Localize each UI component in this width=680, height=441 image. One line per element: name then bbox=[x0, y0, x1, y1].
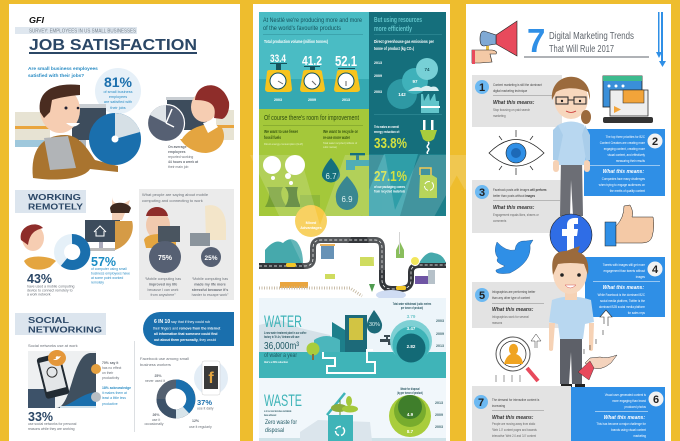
item 5: 5 bbox=[479, 290, 485, 302]
scale: 2013: 2013 bbox=[342, 98, 350, 102]
scale: 2003: 33.4 bbox=[270, 53, 287, 65]
stat: 81%: their jobs bbox=[110, 106, 126, 110]
icon: megaphone bbox=[472, 21, 517, 64]
clock bbox=[148, 104, 184, 142]
year labels: 2009 bbox=[374, 74, 382, 78]
train bbox=[259, 282, 362, 296]
stat: 43%: 43% bbox=[27, 272, 52, 286]
badge: mixed advantages: Advantages bbox=[300, 226, 322, 230]
year labels: 2003 bbox=[374, 90, 382, 94]
chart: social networks use at work bbox=[28, 343, 96, 408]
twitter bubble bbox=[48, 350, 66, 366]
item 2: the merits of quality content bbox=[610, 189, 645, 193]
section: packaging: of our packaging comes bbox=[374, 185, 405, 189]
figure: man bbox=[549, 246, 594, 387]
section: water: A new water treatment plant in our coffee bbox=[264, 330, 307, 335]
item 6: 6 bbox=[653, 394, 659, 406]
section: improvement: We want to recycle or bbox=[323, 129, 358, 134]
car bbox=[286, 263, 406, 290]
item 4: While Facebook is the dominant B2C bbox=[598, 293, 645, 297]
productivity notes: least a little less bbox=[102, 396, 126, 400]
item 2: The top three priorities for B2C bbox=[606, 135, 645, 139]
stat: 33% bbox=[28, 410, 77, 431]
item 7: 'Web 1.0' content pages and towards bbox=[492, 428, 537, 432]
heading: working remotely bbox=[15, 190, 86, 213]
stat: 33%: use social networks for personal bbox=[28, 422, 77, 426]
facebook use heading: Facebook use among small bbox=[140, 356, 189, 361]
section: packaging: 27.1% bbox=[374, 169, 407, 185]
icon: hand with arrow bbox=[578, 310, 617, 380]
icon: eye bbox=[489, 130, 544, 175]
donut labels: use it regularly bbox=[189, 425, 212, 429]
item 7: interactive 'Web 2.0 and 3.0' content bbox=[492, 434, 536, 438]
item 4: What this means: bbox=[603, 285, 644, 291]
item 6: brands using visual content bbox=[611, 428, 646, 432]
man at desk bbox=[110, 196, 133, 250]
phone icon bbox=[36, 353, 70, 399]
stat: 37%: use it daily bbox=[197, 406, 214, 410]
item 1: Stop focusing on paid search bbox=[493, 108, 530, 112]
monitor: man bbox=[70, 104, 106, 148]
stat: 43%: a work network bbox=[27, 292, 51, 296]
section: waste: WASTE bbox=[264, 391, 302, 410]
item 1: Content marketing is still the dominant bbox=[493, 83, 542, 87]
woman illustration bbox=[180, 85, 229, 153]
stat: 33.8%: 33.8% bbox=[374, 136, 407, 152]
stat: 25%: 25% bbox=[204, 255, 218, 262]
section: improvement: fossil fuels bbox=[264, 135, 281, 140]
item 2: measuring their results bbox=[616, 159, 645, 163]
stat: 57% bbox=[91, 255, 130, 284]
chart: waste for disposal: 2013 bbox=[435, 401, 443, 405]
item 4: 4 bbox=[652, 264, 659, 276]
background buildings bbox=[15, 110, 234, 147]
icon: twitter bird bbox=[495, 240, 533, 274]
question: Are small business employees bbox=[28, 66, 98, 72]
quotes: made my life more bbox=[194, 282, 226, 286]
productivity notes: it makes them at bbox=[102, 391, 127, 395]
item 6: Visual user-generated content is bbox=[605, 393, 646, 397]
question: satisfied with their jobs? bbox=[28, 73, 84, 79]
item 1 bbox=[472, 75, 562, 127]
productivity notes: 18% acknowledge bbox=[102, 386, 131, 390]
year labels bbox=[374, 61, 382, 94]
factory bbox=[408, 86, 440, 113]
stat: 33%: reasons while they are working bbox=[28, 427, 75, 431]
section: packaging: from recycled materials bbox=[374, 190, 405, 194]
item 7 bbox=[472, 386, 571, 441]
section: efficiency: Direct greenhouse gas emissions per bbox=[374, 39, 434, 44]
survey band bbox=[15, 27, 137, 34]
quotes: because I can work bbox=[148, 288, 179, 292]
chart: total water withdrawal: 2009 bbox=[436, 332, 444, 336]
clock caption: On average bbox=[168, 145, 186, 149]
stat: 43% bbox=[27, 272, 75, 296]
item 3: Facebook posts with images will perform bbox=[493, 188, 546, 192]
item 3 bbox=[472, 180, 562, 233]
item 6: What this means: bbox=[604, 415, 645, 421]
productivity notes bbox=[102, 361, 131, 406]
item 3: What this means: bbox=[493, 205, 535, 211]
clock caption: employees bbox=[168, 150, 186, 154]
item 7: The demand for interactive content is bbox=[492, 398, 540, 402]
heading: working remotely: WORKING bbox=[28, 192, 81, 202]
water drop: 6.9: 6.9 bbox=[342, 194, 353, 204]
item 2: engaging content, creating more bbox=[604, 147, 645, 151]
chart: total water withdrawal: 3.79 bbox=[407, 314, 416, 319]
section: waste: Zero waste for bbox=[265, 419, 298, 426]
chart: waste for disposal: 4.9 bbox=[407, 412, 414, 417]
bubbles: emissions: 74 bbox=[424, 67, 430, 72]
scale: 2009 bbox=[300, 53, 325, 102]
section: waste bbox=[259, 378, 446, 441]
item 1: marketing bbox=[493, 114, 506, 118]
chart: waste for disposal: 8.7 bbox=[407, 429, 414, 434]
man illustration bbox=[33, 84, 118, 180]
item 7: People are moving away from static bbox=[492, 422, 536, 426]
title: Digital Marketing Trends bbox=[549, 31, 634, 42]
water drop: 30%: 30% bbox=[369, 322, 380, 328]
bubbles: emissions: 142 bbox=[398, 92, 406, 97]
section: water: WATER bbox=[264, 312, 302, 331]
chart: total water withdrawal bbox=[390, 301, 444, 364]
clock caption: reported working bbox=[168, 155, 193, 159]
callout: 6 in 10: their fingers and remove from the internet bbox=[153, 326, 221, 330]
icon: arrows bbox=[656, 12, 666, 67]
stat: 43%: have used a mobile computing bbox=[27, 284, 75, 288]
watermark bbox=[250, 155, 492, 270]
stat: 57%: business employees have bbox=[91, 272, 130, 276]
clock caption: 44 hours a week at bbox=[168, 160, 199, 164]
monitor: woman bbox=[166, 97, 208, 130]
item 4: dominant B2B social media platform bbox=[599, 305, 645, 309]
donut labels: 25% bbox=[154, 374, 162, 378]
scale: 2003 bbox=[265, 53, 292, 102]
panel: mobile computing opinions bbox=[139, 189, 234, 300]
item 1: digital marketing technique bbox=[493, 89, 527, 93]
item 1: What this means: bbox=[493, 100, 535, 106]
item 2: Companies face many challenges bbox=[602, 177, 645, 181]
donut labels: occasionally bbox=[144, 422, 164, 426]
survey band: SURVEY: EMPLOYEES IN US SMALL BUSINESSES bbox=[29, 28, 137, 34]
item 7: increasing bbox=[492, 404, 505, 408]
section: waste: x of our xxx factories worldwide bbox=[264, 410, 292, 413]
panel: mobile computing opinions: computing and connecting to work bbox=[142, 198, 203, 203]
phone with facebook: f bbox=[208, 370, 214, 387]
water drop: 30% bbox=[367, 310, 382, 334]
section: waste: have achieved bbox=[264, 414, 277, 417]
item 3: Engagement equals likes, shares or bbox=[493, 213, 539, 217]
scale: 2009: 41.2 bbox=[302, 53, 322, 68]
lake and buildings bbox=[376, 252, 446, 300]
chart: total water withdrawal: per tonne of product) bbox=[401, 305, 423, 310]
title: JOB SATISFACTION bbox=[29, 37, 197, 54]
item 4: for sales reps bbox=[628, 311, 645, 315]
item 4: images bbox=[636, 275, 645, 279]
icon: facebook bbox=[550, 214, 592, 256]
quotes: stressful because it's bbox=[192, 288, 228, 292]
chart: total water withdrawal: Total water withdrawal (cubic metres bbox=[393, 301, 432, 306]
item 5: reasons bbox=[492, 321, 502, 325]
donut: facebook use bbox=[161, 384, 191, 414]
productivity notes: productivity bbox=[102, 376, 119, 380]
item 6: This has become a major challenge for bbox=[596, 422, 647, 426]
stat: 37% bbox=[197, 398, 214, 410]
heading: social networking: SOCIAL bbox=[28, 315, 69, 325]
title: That Will Rule 2017 bbox=[549, 44, 614, 55]
scale: 2013 bbox=[334, 53, 360, 102]
callout: 6 in 10: out about them personally, they would bbox=[154, 338, 216, 342]
section: water: factory in Tri An, Vietnam will save bbox=[264, 334, 300, 339]
section: production: At Nestlé we're producing more and more bbox=[263, 17, 362, 24]
stat: 81% bbox=[95, 68, 141, 114]
people with laptops bbox=[144, 205, 226, 248]
chart: waste for disposal: (kg per tonne of product) bbox=[397, 390, 423, 395]
heading: working remotely: REMOTELY bbox=[28, 202, 83, 212]
icon: magnifier bbox=[496, 334, 541, 382]
stat: 33.8%: This makes an overall bbox=[374, 125, 399, 129]
item 7: What this means: bbox=[492, 415, 534, 421]
quotes: from anywhere” bbox=[151, 293, 176, 297]
item 4: Tweets with images still get more bbox=[603, 263, 645, 267]
chart: waste for disposal bbox=[389, 386, 443, 437]
item 4: social media platform, Twitter is the bbox=[600, 299, 645, 303]
item 2: Content Creators are creating more bbox=[600, 141, 645, 145]
chart: waste for disposal: 2009 bbox=[435, 413, 443, 417]
clock caption bbox=[168, 145, 199, 169]
section: production: of the world's favourite products bbox=[263, 25, 341, 32]
item 5: What this means: bbox=[492, 307, 534, 313]
title bbox=[524, 22, 649, 59]
stat: 57%: remotely bbox=[91, 280, 104, 284]
scale: 2003: 2003 bbox=[274, 98, 282, 102]
panel: job satisfaction bbox=[9, 4, 240, 441]
phone with facebook bbox=[194, 361, 228, 395]
logo: GFI bbox=[29, 16, 45, 25]
productivity notes: on their bbox=[102, 371, 114, 375]
chart: total water withdrawal: 2013 bbox=[436, 344, 444, 348]
donut labels: 26% bbox=[152, 413, 160, 417]
bubbles: emissions: 97 bbox=[412, 79, 418, 84]
recycling bin with plant bbox=[300, 393, 372, 441]
item 5: Infographics are performing better bbox=[492, 290, 536, 294]
clock caption: their main job bbox=[168, 165, 188, 169]
donut: 57% bbox=[59, 239, 85, 265]
tap bbox=[346, 153, 369, 170]
badge: mixed advantages bbox=[295, 205, 327, 237]
scale: 2009: 2009 bbox=[308, 98, 316, 102]
icon: thumbs up bbox=[605, 205, 654, 246]
chimneys and fuel bubbles bbox=[263, 155, 320, 207]
item 2 bbox=[584, 129, 665, 196]
icon: plug bbox=[420, 120, 437, 154]
facebook use heading: business workers bbox=[140, 362, 171, 367]
section: water: that's a 30% reduction bbox=[264, 360, 288, 364]
item 6: marketing bbox=[633, 434, 646, 438]
callout: 6 in 10: all information that someone could find bbox=[154, 332, 217, 336]
stat: 57%: 57% bbox=[91, 255, 116, 269]
item 3: comments bbox=[493, 219, 507, 223]
item 5: Infographics work for several bbox=[492, 315, 529, 319]
item 6: produced photos bbox=[625, 405, 646, 409]
callout: 6 in 10 bbox=[143, 312, 234, 346]
section: waste: disposal bbox=[265, 427, 284, 434]
stat: 37%: 37% bbox=[197, 398, 212, 407]
panel: digital marketing trends bbox=[466, 4, 671, 441]
chart: waste for disposal: Waste for disposal bbox=[400, 386, 420, 391]
section: improvement: Of course there's room for improvement bbox=[264, 115, 359, 122]
item 5: than any other type of content bbox=[492, 296, 530, 300]
icon: laptop and chat bbox=[603, 76, 653, 123]
productivity notes: has no effect bbox=[102, 366, 121, 370]
section: efficiency bbox=[369, 12, 446, 154]
section: road bbox=[259, 205, 446, 300]
donut labels: 12% bbox=[192, 419, 200, 423]
item 7: 7 bbox=[478, 397, 484, 409]
billboards and trees bbox=[320, 232, 404, 292]
section: water bbox=[259, 298, 446, 378]
section: water: of water a year bbox=[264, 352, 298, 359]
item 3: better than posts without images bbox=[493, 194, 535, 198]
item 5 bbox=[472, 282, 572, 328]
quotes: improved my life bbox=[149, 282, 177, 286]
panel: nestle infographic bbox=[253, 4, 450, 441]
scale: 2013: 52.1 bbox=[335, 53, 357, 70]
item 6 bbox=[571, 387, 665, 441]
road bbox=[259, 240, 446, 289]
chart: total water withdrawal: 2.82 bbox=[407, 344, 416, 349]
quotes: “Mobile computing has bbox=[192, 277, 228, 281]
stat: 33.8% bbox=[374, 125, 407, 152]
donut labels: never used it bbox=[145, 379, 165, 383]
stat: 33%: 33% bbox=[28, 410, 53, 424]
quotes: harder to escape work” bbox=[192, 293, 229, 297]
section: improvement: cubic metres) bbox=[323, 145, 337, 149]
pie: 81% satisfied bbox=[89, 113, 141, 165]
item 2: 2 bbox=[652, 136, 658, 148]
section: production bbox=[259, 12, 369, 109]
item 4: engagement than tweets without bbox=[604, 269, 645, 273]
section: production: Total production volume (million tonnes) bbox=[264, 39, 328, 44]
section: improvement: We want to use fewer bbox=[264, 129, 298, 134]
section: efficiency: But using resources bbox=[374, 17, 422, 24]
section: improvement: Total water recycled (millions of bbox=[323, 141, 357, 145]
item 2: when trying to engage audiences on bbox=[599, 183, 645, 187]
chart: social networks use at work: Social networks use at work bbox=[28, 343, 78, 348]
donut labels bbox=[144, 374, 212, 429]
question bbox=[28, 66, 98, 79]
quotes bbox=[145, 277, 229, 297]
chart: waste for disposal: 2003 bbox=[435, 425, 443, 429]
stat: 81%: of small business bbox=[103, 90, 133, 94]
stat: 33.8%: energy reduction of: bbox=[374, 130, 400, 134]
water drop: 6.7: 6.7 bbox=[326, 171, 337, 181]
item 2: visual content, and effectively bbox=[607, 153, 645, 157]
stat: 81%: are satisfied with bbox=[104, 100, 132, 104]
productivity notes: 70% say it bbox=[102, 361, 119, 365]
section: packaging bbox=[369, 154, 446, 216]
monitor with home icon bbox=[85, 220, 120, 251]
section: improvement: re-use more water bbox=[323, 135, 350, 140]
stat: 57%: of computer using small bbox=[91, 267, 127, 271]
item 2: What this means: bbox=[603, 169, 644, 175]
title: 7 bbox=[527, 22, 545, 59]
hill bbox=[265, 239, 303, 263]
item 1: 1 bbox=[479, 82, 485, 94]
section: efficiency: more efficiently bbox=[374, 26, 412, 33]
heading: social networking bbox=[15, 313, 106, 335]
item 6: more engaging than brand bbox=[612, 399, 646, 403]
figure: woman bbox=[552, 77, 591, 216]
donut labels: use it bbox=[152, 418, 160, 422]
stat: 75%: 75% bbox=[158, 255, 173, 262]
badge: mixed advantages: Mixed bbox=[306, 221, 317, 225]
facebook use heading bbox=[140, 356, 189, 367]
bubbles: emissions bbox=[387, 58, 438, 109]
stat: 57%: at some point worked bbox=[91, 276, 123, 280]
item 3: 3 bbox=[479, 187, 485, 199]
section: improvement bbox=[259, 109, 369, 216]
factory: water bbox=[306, 315, 375, 373]
stat: 81%: 81% bbox=[104, 74, 133, 90]
year labels: 2013 bbox=[374, 61, 382, 65]
stat: 43%: device to connect remotely to bbox=[27, 288, 73, 292]
icons: check and minus bbox=[91, 364, 101, 402]
section: improvement: Direct energy consumption (GJ/t) bbox=[264, 142, 303, 146]
quotes: “Mobile computing has bbox=[145, 277, 181, 281]
section: efficiency: tonne of product (kg CO₂) bbox=[374, 46, 414, 51]
callout: 6 in 10: 6 IN 10 say that if they could rub bbox=[154, 319, 210, 325]
panel: mobile computing opinions: What people are saying about mobile bbox=[142, 192, 209, 197]
productivity notes: productive bbox=[102, 402, 118, 406]
section: water: 36,000m³ bbox=[264, 341, 300, 352]
chart: total water withdrawal: 2003 bbox=[436, 319, 444, 323]
chart: total water withdrawal: 3.47 bbox=[407, 326, 416, 331]
item 4 bbox=[585, 257, 665, 317]
icon: recycled bag bbox=[419, 168, 437, 198]
tap bbox=[380, 335, 391, 345]
woman with phone bbox=[21, 224, 59, 270]
heading: social networking: NETWORKING bbox=[28, 324, 102, 334]
stat: 81%: employees bbox=[109, 95, 127, 99]
